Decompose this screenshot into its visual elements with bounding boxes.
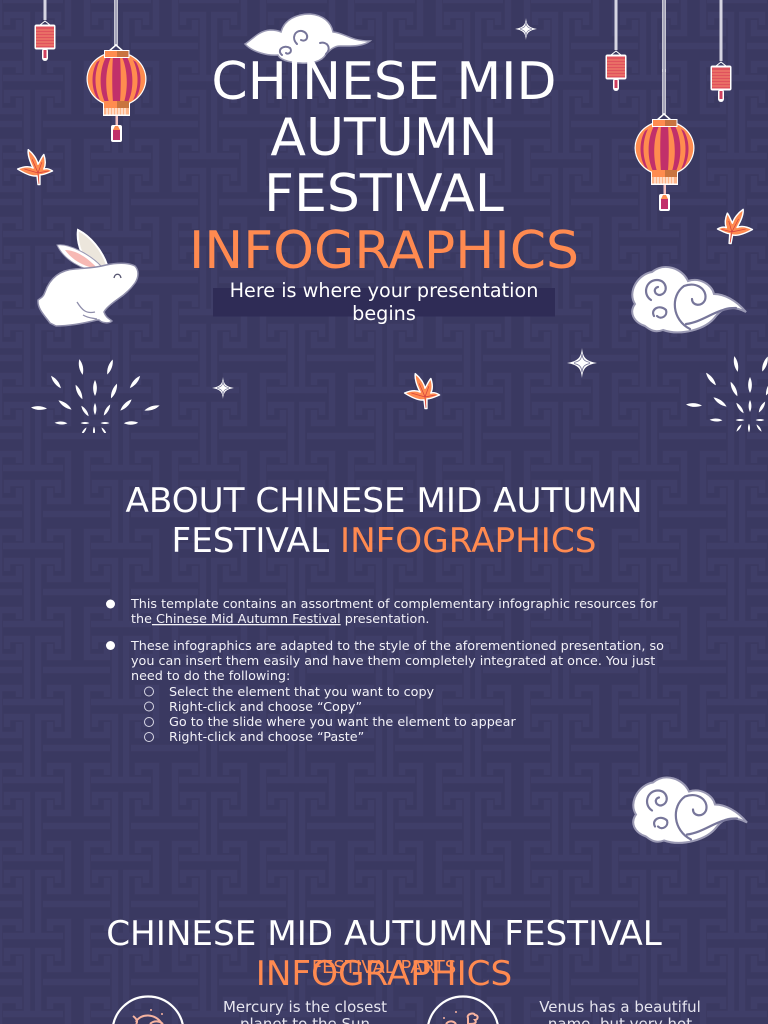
bullet list: Right-click and choose “Paste” xyxy=(169,730,364,745)
subtitle bar xyxy=(213,288,555,316)
heading: about: FESTIVAL INFOGRAPHICS xyxy=(172,521,596,561)
icon: big lantern left xyxy=(86,0,146,142)
icon: star mid left xyxy=(212,377,234,399)
heading: about xyxy=(125,481,643,561)
icon: small lantern right B xyxy=(710,0,732,102)
icon: maple leaf center xyxy=(405,374,440,409)
bullet list: Right-click and choose “Copy” xyxy=(169,700,362,715)
bullet list: you can insert them easily and have them completely integrated at once. You just xyxy=(131,654,655,669)
bullet list: the Chinese Mid Autumn Festival presentation. xyxy=(131,612,429,627)
icon: small lantern right A xyxy=(606,0,626,91)
subtitle: Here is where your presentation xyxy=(230,279,538,302)
subtitle xyxy=(230,279,538,325)
fireworks right xyxy=(686,356,768,432)
subtitle: begins xyxy=(352,302,416,325)
text: mercury: Mercury is the closest xyxy=(223,998,387,1016)
bullet list: These infographics are adapted to the style of the aforementioned presentation, so xyxy=(130,639,664,654)
icon: big lantern right xyxy=(634,0,694,211)
text: venus xyxy=(539,998,701,1024)
text: mercury xyxy=(223,998,387,1024)
icon: cloud right xyxy=(632,267,746,332)
heading: festival parts: CHINESE MID AUTUMN FESTIVAL xyxy=(106,914,662,954)
title xyxy=(189,52,579,281)
title: FESTIVAL xyxy=(264,164,504,224)
icon: small lantern left xyxy=(34,0,56,61)
heading: festival parts: INFOGRAPHICS xyxy=(256,954,512,994)
icon: circle left xyxy=(112,996,184,1024)
heading: festival parts xyxy=(106,914,662,994)
bullet list: Go to the slide where you want the element to appear xyxy=(169,715,516,730)
icon: maple leaf left xyxy=(18,150,53,185)
icon: maple leaf right xyxy=(717,208,754,245)
icon: circle right xyxy=(428,996,498,1024)
bullet list: need to do the following: xyxy=(131,669,290,684)
bullet list: Select the element that you want to copy xyxy=(169,685,435,700)
bullet list xyxy=(106,597,664,745)
title: CHINESE MID xyxy=(211,52,557,112)
title: AUTUMN xyxy=(270,108,498,168)
text: venus: Venus has a beautiful xyxy=(539,998,701,1016)
icon: rabbit xyxy=(38,230,138,326)
icon: cloud top xyxy=(245,14,370,63)
icon: cloud lower xyxy=(633,777,747,843)
heading: about: ABOUT CHINESE MID AUTUMN xyxy=(125,481,643,521)
fireworks left xyxy=(31,359,160,435)
title: INFOGRAPHICS xyxy=(189,221,579,281)
icon: star mid right xyxy=(567,348,597,378)
bullet list: This template contains an assortment of complementary infographic resources for xyxy=(130,597,658,612)
label: festival parts: FESTIVAL PARTS xyxy=(312,957,456,978)
icon: star top xyxy=(515,18,537,40)
